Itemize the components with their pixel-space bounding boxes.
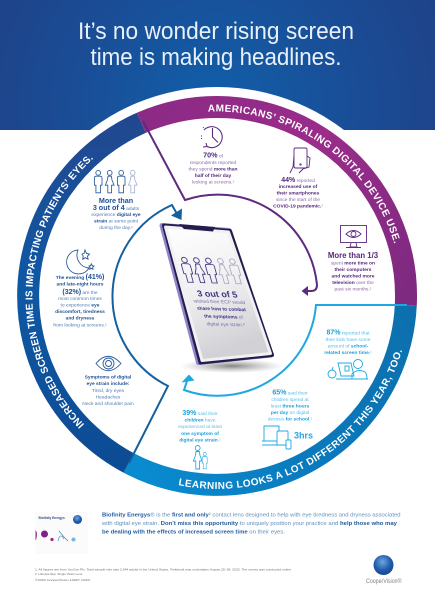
text: strain at some point (94, 218, 139, 224)
text: eye strain include: (87, 381, 130, 387)
phone (162, 224, 284, 373)
text: from looking at screens.¹ (53, 322, 107, 328)
text: experienced at least (178, 424, 223, 430)
figures (179, 257, 243, 284)
ring band: digital device use (137, 96, 417, 306)
stat: more than 1/3 (328, 226, 379, 292)
text: 87% reported that (326, 330, 370, 336)
icon: hand with phone (290, 148, 310, 173)
body copy: with digital eye strain. Don’t miss this opportunity to uniquely position your practice and help those who may (101, 521, 398, 527)
text: 70% of (203, 150, 224, 160)
icon: monitor with eye (340, 226, 366, 248)
text: Neck and shoulder pain (82, 401, 134, 407)
stat: 39% (178, 410, 223, 469)
band heading: digital device: AMERICANS’ SPIRALING DIGITAL DEVICE USE. (208, 104, 400, 244)
text: devices for school.¹ (268, 416, 313, 422)
CooperVision logo: CooperVision® (366, 578, 402, 585)
text: during the day.¹ (99, 225, 133, 231)
CooperVision logo (366, 555, 402, 585)
text: they spend more than (189, 166, 237, 172)
title (78, 18, 354, 71)
footnotes: 1. All figures are from YouGov Plc. Total sample size was 2,044 adults in the United States. Fieldwork was undertaken August 25–28, 2020. The survey was conducted online. (35, 568, 292, 572)
stat: 3 out of 4 adults (91, 170, 141, 231)
text (328, 251, 379, 292)
text: 44% reported (281, 177, 315, 184)
text: per day on digital (271, 410, 309, 416)
body copy: Biofinity Energys ® is the first and only ² contact lens designed to help with eye tiredness and dryness associated (102, 512, 400, 518)
icon: devices (262, 426, 291, 449)
body copy (101, 512, 401, 536)
text: children have (184, 418, 216, 424)
stat: 70% (189, 127, 237, 186)
text: 65% said their (272, 390, 308, 396)
text: one symptom of (181, 431, 219, 437)
text: most common times (58, 296, 102, 302)
icon: moon and stars (67, 250, 94, 274)
product graphics (36, 530, 76, 542)
text: amount of school- (328, 344, 369, 350)
text: Tired, dry eyes (92, 388, 125, 394)
text: digital eye strain.¹ (179, 438, 221, 444)
product name: Biofinity Energys (38, 516, 65, 520)
text: (32%) are the (62, 289, 98, 296)
band heading: learning: LEARNING LOOKS A LOT DIFFERENT THIS YEAR, TOO. (178, 350, 402, 489)
phone body (164, 226, 272, 362)
text (324, 330, 372, 356)
arrow: cyan (182, 305, 407, 396)
phone notch (179, 224, 215, 232)
phone copy: the symptoms of (204, 314, 244, 321)
icon: clock (202, 127, 222, 148)
band heading: patients' eyes: INCREASED SCREEN TIME IS IMPACTING PATIENTS’ EYES. (25, 156, 93, 429)
text (82, 374, 134, 407)
icon: parent and child (193, 446, 207, 469)
text (273, 177, 323, 210)
text (268, 390, 313, 422)
text: COVID-19 pandemic.¹ (273, 204, 323, 210)
phone message (179, 257, 256, 329)
text (178, 410, 223, 444)
stat: evening hours (53, 250, 107, 328)
text: More than 1/3 (328, 251, 379, 260)
footnotes (35, 568, 292, 582)
text: and watched more (332, 274, 375, 280)
text: Symptoms of digital (85, 374, 132, 380)
body copy: be dealing with the effects of increased screen time on their eyes. (102, 530, 285, 536)
text: The evening (41%) (56, 274, 104, 281)
arrow: purple (143, 121, 317, 296)
phone copy: share how to combat (196, 306, 247, 313)
text: 39% said their (182, 410, 218, 417)
text: children spend at (271, 397, 309, 403)
text: experience digital eye (91, 212, 141, 218)
text: 3 out of 4 adults (93, 203, 140, 212)
header background (0, 0, 435, 130)
phone copy (190, 289, 253, 329)
icon: four people (94, 170, 137, 193)
stat: 87% (324, 330, 372, 379)
text: Headaches (96, 394, 121, 400)
phone copy: 3 out of 5 (196, 289, 239, 300)
product box (35, 512, 88, 554)
ring band: learning (124, 305, 417, 496)
icon: eye (96, 356, 121, 371)
text: to experience eye (61, 302, 100, 308)
white circle backing (8, 87, 426, 505)
ring band: patients' eyes (17, 112, 146, 473)
text: past six months.¹ (335, 286, 372, 292)
text: half of their day (195, 173, 231, 179)
text: their computers (335, 267, 372, 273)
text: television over the (332, 280, 374, 286)
text: and dryness (66, 316, 95, 322)
text: least three hours (271, 404, 310, 410)
text: looking at screens.¹ (192, 180, 235, 186)
phone shadow (180, 359, 284, 373)
text: their smartphones (277, 190, 320, 196)
text (53, 274, 107, 328)
icon: child at laptop (328, 360, 368, 379)
phone screen (166, 227, 270, 360)
text: since the start of the (276, 197, 320, 203)
text: increased use of (279, 184, 318, 190)
text (189, 150, 237, 186)
title: It’s no wonder rising screen (78, 18, 354, 45)
text: More than (99, 196, 133, 205)
stat: 65% (262, 390, 313, 449)
footnotes: ©2020 CooperVision 10907 10/20 (35, 579, 91, 582)
stat: 44% (273, 148, 323, 210)
arrow: dark blue (112, 205, 182, 463)
text (91, 196, 141, 231)
text: discomfort, tiredness (55, 309, 105, 315)
text: spent more time on (331, 260, 375, 266)
phone copy: digital eye strain.² (206, 321, 246, 328)
stat: symptoms (82, 356, 134, 407)
3hrs label: 3hrs (294, 430, 313, 440)
product logo sphere (73, 515, 82, 524)
text: related screen time.¹ (324, 350, 372, 356)
text: their kids have some (326, 337, 371, 343)
text: and late-night hours (56, 282, 104, 288)
phone edge (162, 226, 271, 362)
text: respondents reported (190, 160, 237, 166)
title: time is making headlines. (90, 44, 342, 71)
footnotes: 2. Lifestyle Rep. Single Vision Lens. (35, 573, 83, 576)
phone copy: wished their ECP would (193, 299, 246, 306)
